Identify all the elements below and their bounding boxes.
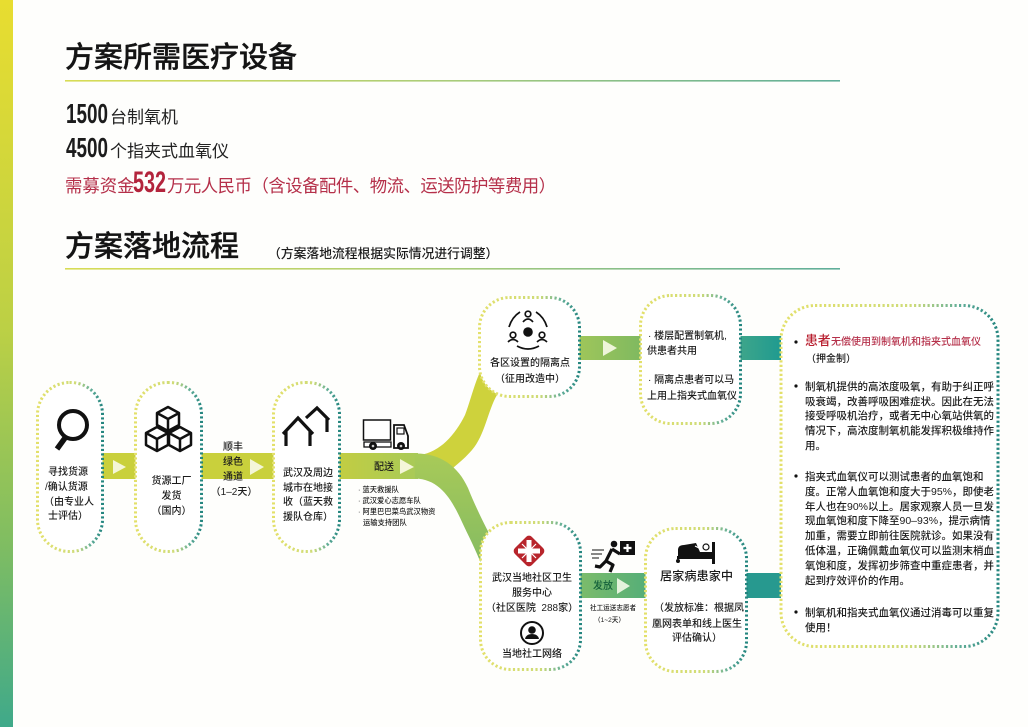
label: green channel: 顺丰 [223,440,243,453]
bullet: oxygen concentrator: 用。 [805,440,826,452]
label: social transport volunteers [590,603,637,624]
panel: find source [38,382,102,552]
label: green channel [211,440,257,498]
funding requirement: 532 [133,166,166,199]
bullet: free use: 患者 [805,333,831,348]
label: green channel: 通道 [223,470,243,483]
heading: implementation process: （方案落地流程根据实际情况进行调整） [268,246,498,261]
label: green channel: （1–2天） [211,486,257,498]
bullet: oximeter: 氧饱和度，发挥初步筛查中重症患者，并 [805,559,994,572]
heading: required medical equipment: 方案所需医疗设备 [65,41,297,74]
text: find source: /确认货源 [45,480,88,493]
icon: houses [283,408,329,446]
list: delivery teams: · 阿里巴巴菜鸟武汉物资 [358,507,435,516]
bullet: oximeter: 低体温，正确佩戴血氧仪可以监测末梢血 [805,544,994,557]
text block: equipment quantities [65,98,556,199]
list: delivery teams [358,485,435,527]
bullet: reusable: 制氧机和指夹式血氧仪通过消毒可以重复 [805,606,994,619]
text: isolation site measures: · 楼层配置制氧机, [648,329,727,342]
text: local warehouse: 城市在地接 [283,481,333,494]
funding requirement: 万元人民币（含设备配件、物流、运送防护等费用） [167,176,556,196]
bullet: oxygen concentrator: 接受呼吸机治疗，或者无中心氧站供氧的 [805,409,994,422]
text: isolation sites [490,356,570,385]
connector curve: to community health centres [415,453,490,566]
text: find source: （由专业人 [44,495,94,508]
oxygen concentrator count: 1500 [66,98,108,129]
list: delivery teams: · 蓝天救援队 [358,485,400,494]
panel: community health centre [480,522,580,670]
heading: implementation process [65,230,840,270]
bullet: oximeter: 加重，需要立即前往医院就诊。如果没有 [805,529,994,542]
arrow 5 [617,578,630,594]
bullet: oximeter: 指夹式血氧仪可以测试患者的血氧饱和 [805,470,984,483]
bullet: reusable [794,606,994,634]
arrow 1 [113,460,126,474]
connector band: source to factory [100,453,138,479]
text: local warehouse [283,466,333,523]
icon: runner with medical box [591,541,635,572]
text: find source: 士评估） [48,509,88,522]
text: home patients: 居家病患家中 [660,568,733,583]
funding requirement [65,166,556,199]
connector band: community centre to home [578,573,647,598]
label: distribution: 配送 [374,460,394,473]
bullet: oximeter: 年人也在90%以上。居家观察人员一旦发 [805,500,995,513]
text: find source [44,465,94,522]
arrow 4 [603,340,617,356]
text: distribution criteria [652,601,744,644]
bullet: oximeter [794,470,995,587]
bullet: oximeter: 起到疗效评价的作用。 [805,574,910,587]
bullet: reusable: 使用！ [805,621,836,634]
connector band: distribution start [338,453,418,479]
connector band: isolation to measures [578,336,642,360]
funding requirement: 需募资金 [65,176,135,196]
connector band: green channel [200,453,276,479]
panel: local warehouse [274,382,340,552]
text: isolation site measures: 供患者共用 [647,344,697,357]
bullet: oxygen concentrator [794,380,994,452]
oximeter count [66,132,229,163]
icon: magnifier [57,411,87,449]
label: green channel: 绿色 [223,455,243,468]
text: isolation site measures: 上用上指夹式血氧仪 [647,389,737,402]
connector band: home to patient [745,573,782,598]
text: distribution criteria: 凰网表单和线上医生 [652,617,742,630]
bullet: oxygen concentrator: 吸衰竭，改善呼吸困难症状。因此在无法 [805,395,994,408]
label: social transport volunteers: 社工运送志愿者 [590,603,637,612]
icon: red medical cross [512,534,546,568]
oximeter count: 个指夹式血氧仪 [110,142,229,161]
text: find source: 寻找货源 [48,465,88,478]
panel: factory shipment [136,382,202,552]
left gradient side bar [0,0,13,727]
list: delivery teams: 运输支持团队 [363,518,407,527]
text: distribution criteria: 评估确认） [672,631,722,644]
icon: cubes [146,407,191,451]
text: isolation sites: 各区设置的隔离点 [490,356,570,369]
text: factory shipment [152,474,192,517]
icon: truck [364,420,408,450]
bullet: oxygen concentrator: 情况下，高浓度制氧机能发挥积极维持作 [805,424,994,437]
text: community centre: （社区医院 288家） [486,601,578,614]
heading: implementation process: 方案落地流程 [65,230,239,263]
list: delivery teams: · 武汉爱心志愿车队 [358,496,422,505]
bullet: free use: 无偿使用到制氧机和指夹式血氧仪 [831,335,981,348]
bullet: oximeter: 现血氧饱和度下降至90–93%，提示病情 [805,514,991,527]
panel: isolation site measures [640,296,740,424]
icon: social worker [521,622,543,644]
arrow 3 [400,459,414,474]
bullet: oxygen concentrator: 制氧机提供的高浓度吸氧，有助于纠正呼 [805,380,994,393]
panel: isolation sites [480,298,580,396]
text: factory shipment: （国内） [152,504,192,517]
text: local warehouse: 收（蓝天救 [283,495,333,508]
oxygen concentrator count: 台制氧机 [110,108,178,127]
icon: patient in bed [676,542,715,564]
text: social worker network: 当地社工网络 [502,647,562,660]
label: social transport volunteers: （1~2天） [594,616,625,624]
arrow 2 [250,459,264,475]
bullet: free use [794,333,981,365]
panel: patients at home [646,528,746,672]
text: factory shipment: 发货 [162,489,182,502]
text: isolation sites: （征用改造中） [495,372,565,385]
label: dispatch: 发放 [593,579,613,592]
text: isolation site measures: · 隔离点患者可以马 [648,373,734,386]
bullet: free use: （押金制） [806,352,856,365]
bullet: oximeter: 度。正常人血氧饱和度大于95%，即使老 [805,485,994,498]
text: community centre: 服务中心 [512,586,552,599]
text: local warehouse: 援队仓库） [283,510,333,523]
text: distribution criteria: （发放标准：根据凤 [654,601,744,614]
text: community centre: 武汉当地社区卫生 [492,571,572,584]
text: factory shipment: 货源工厂 [152,474,192,487]
panel: patient benefits [781,306,998,646]
connector curve: to isolation sites [420,372,497,470]
text: local warehouse: 武汉及周边 [283,466,333,479]
icon: people around centre [508,311,547,349]
text: community centre [486,571,578,614]
oxygen concentrator count [66,98,178,129]
connector band: measures to patient [738,336,782,360]
oximeter count: 4500 [66,132,108,163]
text: isolation site measures [647,329,737,402]
